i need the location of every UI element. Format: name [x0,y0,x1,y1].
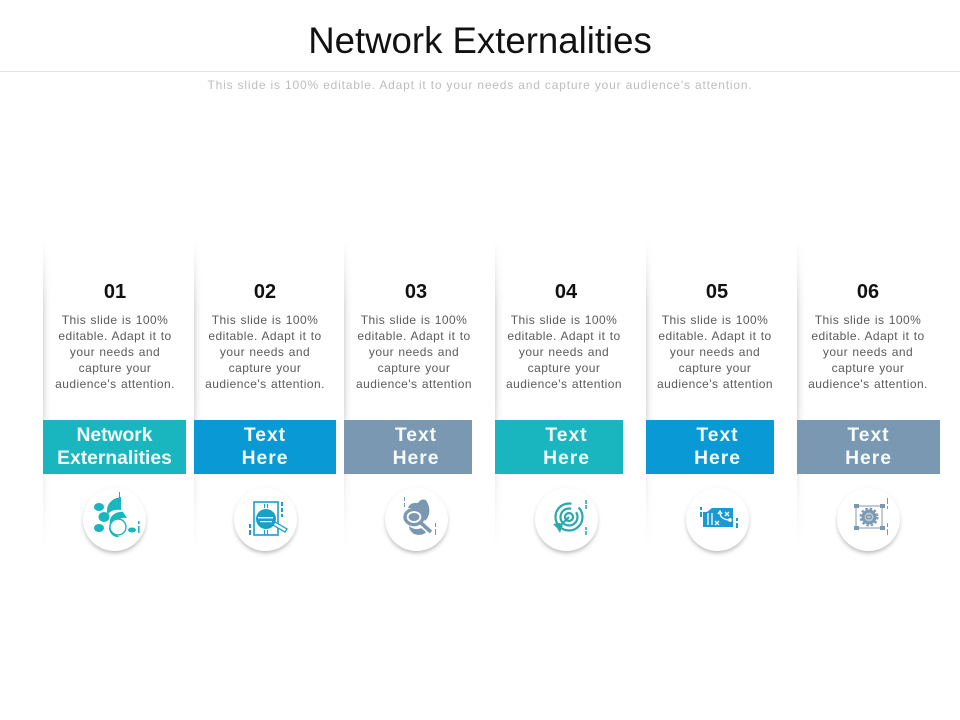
label bar 03: Here [393,448,439,469]
panel: column 02 [194,257,336,556]
text block 06: your needs and [823,345,913,359]
text block 02: editable. Adapt it to [208,329,322,343]
text block 02: capture your [229,361,301,375]
label bar 04 [495,420,623,474]
text block 04 [506,313,622,391]
text block 02: audience's attention. [205,377,325,391]
text block 01: editable. Adapt it to [58,329,172,343]
icon: network magnifier 01 [83,488,146,551]
icon: gear in frame 06 [837,488,900,551]
text block 04: your needs and [519,345,609,359]
label bar 04: Here [543,448,590,469]
text block 04: capture your [528,361,600,375]
panel: column 05 [646,257,774,556]
text block 02: This slide is 100% [212,313,318,327]
text block 04: editable. Adapt it to [507,329,621,343]
text block 06: audience's attention. [808,377,928,391]
label bar 05 [646,420,774,474]
text block 05: This slide is 100% [662,313,768,327]
title: Network Externalities [308,20,652,61]
label bar 06: Here [845,448,892,469]
icon: strategy board 05 [686,488,749,551]
text block 06: This slide is 100% [815,313,921,327]
panel: column 04 [495,257,623,556]
number 05: 05 [706,281,728,303]
label bar 01: Externalities [57,448,172,469]
text block 05: editable. Adapt it to [658,329,772,343]
label bar 02: Text [244,425,286,446]
text block 06 [808,313,928,391]
subtitle: This slide is 100% editable. Adapt it to your needs and capture your audience's attention. [207,78,753,92]
icon: document magnifier 02 [234,488,297,551]
text block 03 [356,313,472,391]
label bar 02 [194,420,336,474]
text block 01 [55,313,175,391]
panel: column 06 [797,257,940,556]
text block 04: This slide is 100% [511,313,617,327]
text block 03: editable. Adapt it to [357,329,471,343]
icon: brain magnifier 03 [385,488,448,551]
text block 06: capture your [832,361,904,375]
text block 01: audience's attention. [55,377,175,391]
label bar 01 [43,420,186,474]
number 01: 01 [104,281,126,303]
number 06: 06 [857,281,879,303]
panel: column 03 [344,257,472,556]
text block 03: audience's attention [356,377,472,391]
panel: column 01 [43,257,186,556]
text block 01: your needs and [70,345,160,359]
label bar 05: Here [694,448,741,469]
text block 05: your needs and [670,345,760,359]
text block 03: your needs and [369,345,459,359]
text block 05 [657,313,773,391]
label bar 05: Text [696,425,739,446]
label bar 01: Network [76,425,153,446]
label bar 06: Text [847,425,890,446]
text block 05: audience's attention [657,377,773,391]
text block 06: editable. Adapt it to [811,329,925,343]
text block 02 [205,313,325,391]
text block 04: audience's attention [506,377,622,391]
label bar 04: Text [545,425,588,446]
icon: target and arrow 04 [535,488,598,551]
label bar 02: Here [242,448,288,469]
text block 01: capture your [79,361,151,375]
text block 03: This slide is 100% [361,313,467,327]
label bar 03: Text [395,425,437,446]
text block 01: This slide is 100% [62,313,168,327]
text block 02: your needs and [220,345,310,359]
number 03: 03 [405,281,427,303]
number 04: 04 [555,281,577,303]
text block 05: capture your [679,361,751,375]
label bar 03 [344,420,472,474]
label bar 06 [797,420,940,474]
number 02: 02 [254,281,276,303]
text block 03: capture your [378,361,450,375]
